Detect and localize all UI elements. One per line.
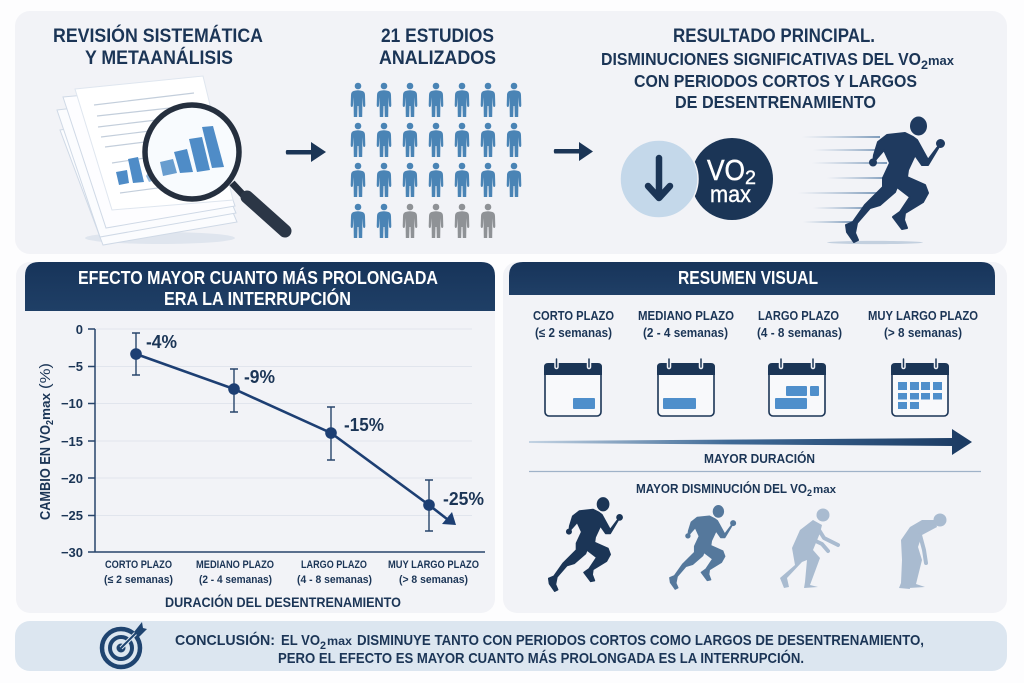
y axis ticks (61, 322, 83, 560)
period labels: MEDIANO PLAZO (638, 309, 734, 323)
x axis labels: LARGO PLAZO (301, 559, 367, 571)
value labels: -15% (344, 415, 384, 435)
panel: study overview (15, 11, 1007, 254)
label: greater decrease: max (813, 484, 837, 496)
arrow: studies to result (554, 142, 593, 161)
y axis ticks: 0 (76, 322, 83, 337)
icon: papers under magnifying glass (57, 76, 285, 245)
heading: main result: RESULTADO PRINCIPAL. (673, 26, 875, 47)
heading: main result: CON PERIODOS CORTOS Y LARGOS (634, 71, 917, 91)
icon: VO2max decrease: VO (707, 155, 745, 187)
period labels: (4 - 8 semanas) (757, 326, 842, 340)
error bars (132, 333, 433, 531)
heading: main result: DE DESENTRENAMIENTO (675, 92, 876, 112)
icon: calendar long term (768, 359, 826, 416)
icon: moderate runner (670, 506, 735, 589)
icon: calendar short term (544, 359, 602, 416)
summary header (509, 262, 995, 295)
label: greater decrease: 2 (807, 488, 812, 498)
heading: 21 studies: ANALIZADOS (379, 48, 496, 69)
y axis ticks: −30 (61, 545, 83, 560)
chart header (25, 262, 495, 311)
x axis labels: (2 - 4 semanas) (199, 574, 272, 586)
y axis ticks: −5 (68, 359, 83, 374)
x axis labels: MEDIANO PLAZO (196, 559, 274, 571)
icon: calendar very long term (891, 359, 949, 416)
panel: visual summary (503, 262, 1007, 613)
heading: systematic review: REVISIÓN SISTEMÁTICA (53, 25, 263, 47)
heading: main result: max (928, 53, 955, 68)
conclusion text: CONCLUSIÓN: (175, 631, 275, 649)
icon: calendar medium term (657, 359, 715, 416)
heading: main result: DISMINUCIONES SIGNIFICATIVAS DEL VO (601, 49, 921, 69)
period labels: LARGO PLAZO (758, 309, 839, 323)
label: longer duration: MAYOR DURACIÓN (704, 451, 815, 466)
heading: main result: 2 (921, 58, 928, 72)
chart header: EFECTO MAYOR CUANTO MÁS PROLONGADA (78, 267, 438, 288)
x axis labels: CORTO PLAZO (105, 559, 172, 571)
icon: target with arrow (102, 622, 147, 667)
conclusion text: 2 (320, 640, 326, 652)
chart: VO2max change by duration (37, 322, 485, 610)
period labels: CORTO PLAZO (533, 309, 614, 323)
icon: exhausted figure (899, 514, 946, 589)
period labels (533, 309, 978, 340)
heading: 21 studies (379, 26, 496, 69)
y axis ticks: −10 (61, 396, 83, 411)
x axis labels (104, 559, 479, 586)
icon: running athlete with speed lines (798, 118, 944, 244)
y axis title: max (38, 392, 53, 420)
icon: VO2max decrease (620, 138, 773, 220)
y axis title: 2 (45, 420, 56, 425)
value labels: -25% (443, 489, 484, 509)
icon: slowing figure (780, 508, 838, 588)
heading: systematic review (53, 25, 263, 69)
period labels: (> 8 semanas) (884, 326, 962, 340)
period labels: MUY LARGO PLAZO (868, 309, 978, 323)
trend line with arrow (136, 354, 447, 519)
value labels: -9% (244, 367, 275, 387)
icon: VO2max decrease: 2 (745, 168, 756, 189)
y axis title (37, 363, 56, 520)
icon: VO2max decrease: max (710, 181, 751, 207)
conclusion text: DISMINUYE TANTO CON PERIODOS CORTOS COMO LARGOS DE DESENTRENAMIENTO, (357, 632, 924, 649)
arrow: review to studies (286, 142, 326, 162)
icon: grid of 27 people (351, 83, 521, 238)
arrow: longer duration (529, 429, 972, 455)
conclusion text: max (327, 634, 352, 648)
period labels: (≤ 2 semanas) (535, 326, 612, 340)
y axis ticks: −25 (61, 508, 83, 523)
panel: conclusion (15, 621, 1007, 671)
summary header: RESUMEN VISUAL (678, 268, 818, 288)
label: greater decrease: MAYOR DISMINUCIÓN DEL VO (636, 481, 807, 496)
value labels: -4% (146, 332, 177, 352)
period labels: (2 - 4 semanas) (643, 326, 728, 340)
y axis ticks: −15 (61, 434, 83, 449)
panel: line chart (16, 262, 495, 613)
conclusion text: EL VO (281, 632, 320, 649)
value labels (146, 332, 484, 509)
icon: strong runner (549, 498, 622, 591)
x axis title: DURACIÓN DEL DESENTRENAMIENTO (165, 593, 401, 610)
conclusion text: PERO EL EFECTO ES MAYOR CUANTO MÁS PROLONGADA ES LA INTERRUPCIÓN. (278, 649, 804, 667)
heading: main result (601, 26, 955, 112)
x axis labels: (4 - 8 semanas) (297, 574, 372, 586)
heading: 21 studies: 21 ESTUDIOS (381, 26, 494, 47)
x axis labels: (> 8 semanas) (399, 574, 468, 586)
data points (130, 348, 435, 511)
conclusion text (175, 631, 924, 667)
x axis labels: MUY LARGO PLAZO (388, 559, 479, 571)
x axis labels: (≤ 2 semanas) (104, 574, 173, 586)
y axis title: (%) (37, 363, 54, 389)
chart header: ERA LA INTERRUPCIÓN (164, 288, 351, 309)
y axis ticks: −20 (61, 471, 83, 486)
y axis title: CAMBIO EN VO (37, 425, 54, 520)
heading: systematic review: Y METAANÁLISIS (85, 47, 233, 69)
